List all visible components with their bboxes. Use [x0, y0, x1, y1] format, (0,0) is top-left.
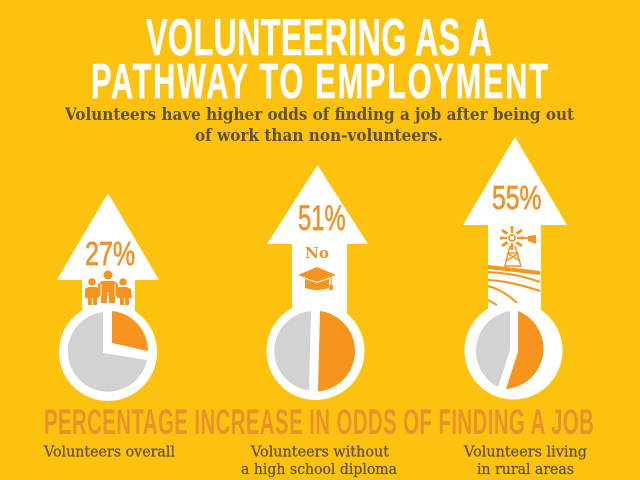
- panel: rural areas: [463, 137, 567, 400]
- captions: Volunteers without: [250, 444, 389, 460]
- pie chart 51%: [266, 302, 364, 400]
- title: VOLUNTEERING AS A: [146, 9, 492, 67]
- captions: in rural areas: [477, 462, 574, 478]
- icon: graduation cap: [298, 267, 336, 290]
- subtitle: of work than non-volunteers.: [195, 126, 443, 145]
- subtitle: [64, 105, 574, 145]
- captions: Volunteers overall: [43, 444, 175, 460]
- arrow 1: [57, 193, 159, 320]
- captions: Volunteers living: [463, 444, 587, 460]
- panel: volunteers overall: [57, 193, 159, 401]
- stat 51%: 51%: [298, 200, 346, 238]
- captions: a high school diploma: [241, 462, 397, 478]
- No label: No: [305, 244, 329, 262]
- icon: people: [85, 270, 132, 305]
- icon: windmill and fields: [488, 226, 540, 305]
- pie chart 55%: [464, 302, 562, 400]
- stat 27%: 27%: [85, 236, 135, 273]
- heading: percentage increase: PERCENTAGE INCREASE IN ODDS OF FINDING A JOB: [44, 403, 594, 443]
- title: [91, 9, 548, 109]
- title: PATHWAY TO EMPLOYMENT: [91, 54, 548, 109]
- arrow 2: [267, 165, 368, 320]
- subtitle: Volunteers have higher odds of finding a job after being out: [64, 105, 574, 124]
- arrow 3: [463, 137, 567, 320]
- pie chart 27%: [59, 303, 157, 401]
- panel: no diploma: [266, 165, 368, 400]
- captions: [43, 444, 587, 478]
- stat 55%: 55%: [492, 181, 542, 217]
